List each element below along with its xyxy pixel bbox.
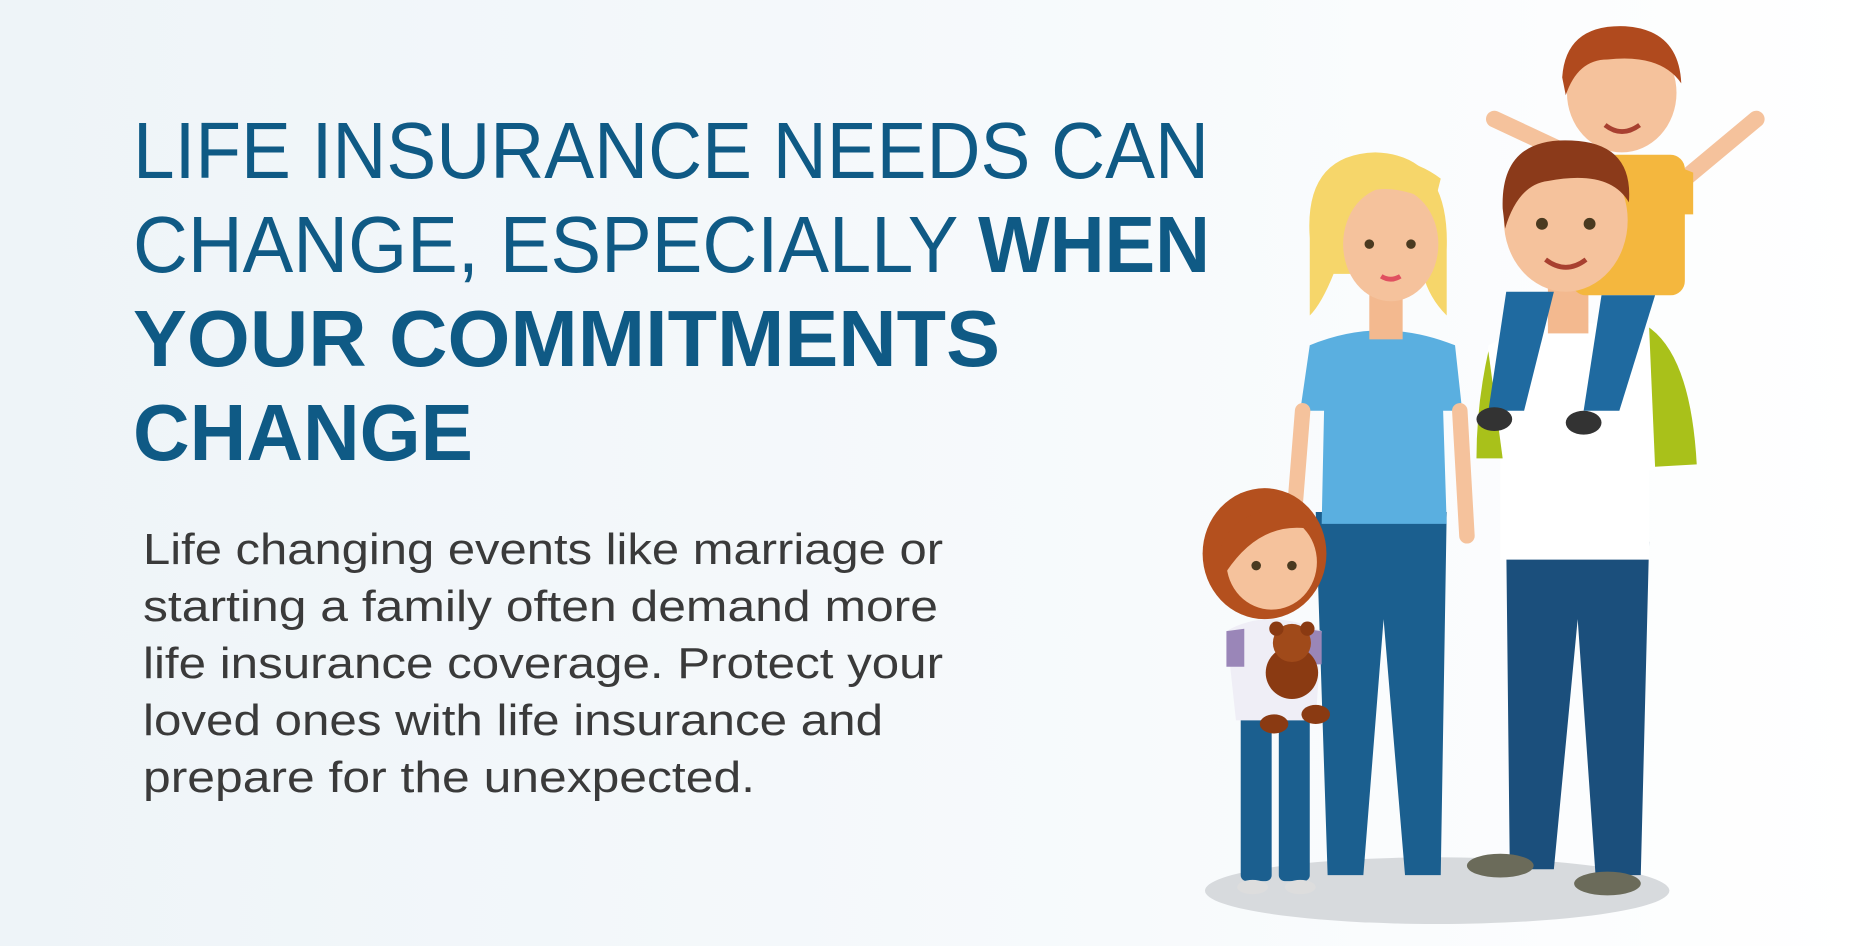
title — [133, 106, 1210, 477]
figure: girl with teddy bear — [1203, 488, 1330, 894]
title: CHANGE, ESPECIALLY WHEN — [133, 200, 1210, 289]
body text: Life changing events like marriage or — [143, 525, 943, 574]
body text: prepare for the unexpected. — [143, 753, 755, 802]
title: CHANGE — [133, 388, 473, 477]
body text: life insurance coverage. Protect your — [143, 639, 943, 688]
figure: mom — [1295, 152, 1467, 875]
figure: boy on shoulders — [1476, 26, 1756, 435]
title: YOUR COMMITMENTS — [133, 294, 1000, 383]
body text — [143, 525, 943, 802]
illustration: family — [1203, 26, 1756, 924]
body text: starting a family often demand more — [143, 582, 938, 631]
body text: loved ones with life insurance and — [143, 696, 883, 745]
figure: dad body — [1467, 262, 1697, 895]
title: LIFE INSURANCE NEEDS CAN — [133, 106, 1209, 195]
ground shadow — [1205, 857, 1669, 924]
figure: dad head — [1503, 140, 1629, 292]
